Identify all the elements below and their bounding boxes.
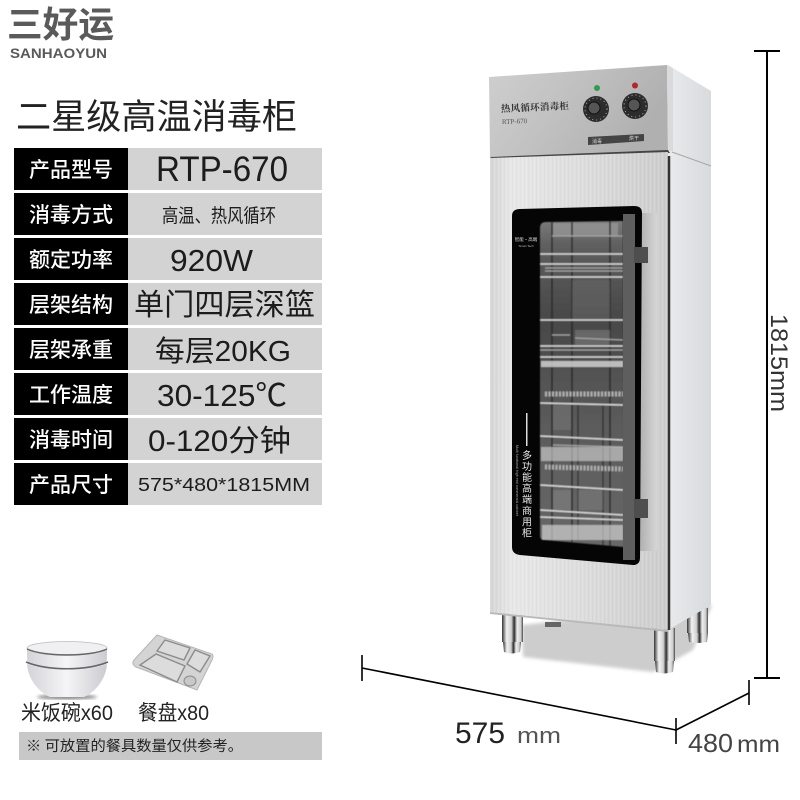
row: method: 消毒方式 <box>29 199 113 229</box>
row: load: 每层20KG <box>155 335 291 368</box>
logo: SANHAOYUN <box>10 45 107 61</box>
dark uprights <box>552 221 610 546</box>
panel label strip <box>588 134 644 145</box>
knobs <box>583 93 648 122</box>
row: time: 0-120分钟 <box>148 425 291 458</box>
door handle <box>640 213 657 551</box>
row: power: 920W <box>170 243 254 278</box>
rack wires <box>540 254 623 520</box>
row: method: 高温、热风循环 <box>162 201 276 228</box>
footnote: ※ 可放置的餐具数量仅供参考。 <box>26 735 243 756</box>
spec table <box>14 148 322 505</box>
middle leg <box>545 622 561 627</box>
window badge <box>515 236 538 248</box>
row: size <box>14 463 322 505</box>
row: structure <box>14 280 322 325</box>
middle soft panel <box>572 280 610 320</box>
row: structure: 单门四层深篮 <box>134 280 315 324</box>
row: load <box>14 328 322 370</box>
control panel <box>489 65 673 157</box>
row: time: 消毒时间 <box>29 424 113 454</box>
hinges <box>634 247 648 518</box>
panel model: RTP-670 <box>502 117 528 126</box>
window vertical text: 多功能高端商用柜 <box>520 449 534 539</box>
footnote <box>19 732 322 760</box>
top light patch <box>553 223 618 236</box>
interior <box>540 221 624 547</box>
window badge: Smart Tech <box>518 244 534 248</box>
row: size: 575*480*1815MM <box>138 475 310 495</box>
door window <box>512 206 648 565</box>
row: model: 产品型号 <box>29 154 113 184</box>
panel label strip: 消毒 <box>592 138 602 145</box>
dimension: depth <box>676 680 780 758</box>
door frame strip <box>623 214 635 560</box>
door panel <box>490 152 669 632</box>
dimension: width <box>362 655 676 750</box>
product: disinfection cabinet <box>489 65 712 674</box>
row: temperature: 30-125℃ <box>157 378 287 413</box>
label: trays: 餐盘x80 <box>138 702 209 725</box>
side panel <box>668 65 711 630</box>
window vertical english text: Multi functional high end commercial cabinet <box>515 445 519 516</box>
row: structure: 层架结构 <box>29 289 113 319</box>
floor shadow <box>522 605 712 672</box>
dimension: depth: mm <box>737 731 780 757</box>
window vertical divider <box>526 413 528 446</box>
icon: stacked rice bowls <box>26 642 108 700</box>
label: rice bowls: 米饭碗x60 <box>21 702 113 725</box>
panel caption: 热风循环消毒柜 <box>501 98 570 115</box>
dimension: width: mm <box>517 723 561 748</box>
title: 二星级高温消毒柜 <box>16 89 297 140</box>
row: time <box>14 418 322 460</box>
window badge: 智能·高端 <box>515 236 538 243</box>
row: power <box>14 238 322 280</box>
row: size: 产品尺寸 <box>29 469 113 499</box>
row: load: 层架承重 <box>29 334 113 364</box>
seam <box>490 150 670 159</box>
row: temperature <box>14 373 322 415</box>
panel label strip: 烘干 <box>629 135 639 142</box>
indicator lights <box>594 82 638 91</box>
row: method <box>14 193 322 235</box>
row: model: RTP-670 <box>156 150 288 189</box>
dimension: height: 1815mm <box>765 314 792 412</box>
icon: compartment tray <box>133 635 213 690</box>
left leg <box>502 615 523 654</box>
back leg <box>687 608 708 643</box>
row: temperature: 工作温度 <box>29 379 113 409</box>
row: power: 额定功率 <box>29 244 113 274</box>
dotted rack bands <box>545 394 623 469</box>
row: model <box>14 148 322 190</box>
dimension: width: 575 <box>455 717 505 750</box>
dimension: depth: 480 <box>688 728 733 758</box>
right leg <box>654 628 675 674</box>
